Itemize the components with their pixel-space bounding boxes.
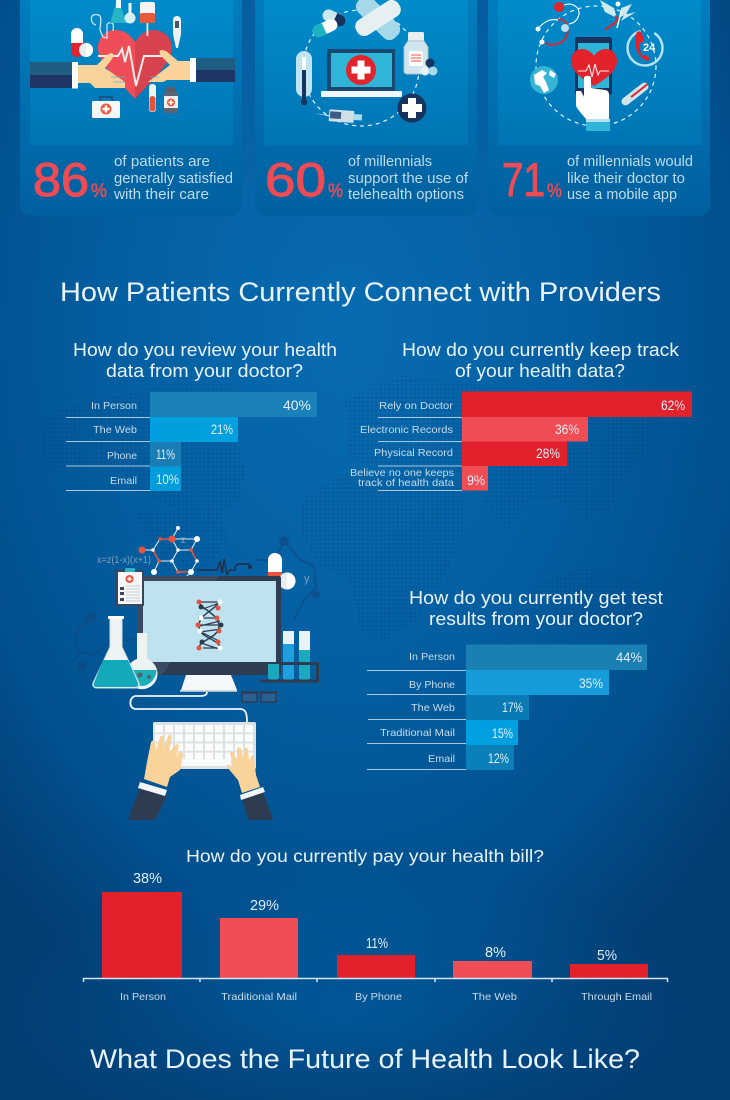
equation and variables bbox=[97, 535, 310, 585]
capsule bbox=[268, 553, 296, 590]
icon: IV bag bbox=[140, 2, 155, 36]
chart heading: How do you currently get test bbox=[409, 587, 663, 608]
text: telehealth support: support the use of bbox=[348, 171, 469, 187]
equation and variables: z bbox=[181, 535, 186, 546]
labels: 62% bbox=[661, 398, 685, 413]
labels: 40% bbox=[283, 398, 311, 413]
test tube rack bbox=[260, 631, 318, 682]
chart: keep track of health data bbox=[350, 339, 692, 490]
heading: how patients connect: How Patients Currently Connect with Providers bbox=[60, 277, 661, 307]
labels bbox=[91, 398, 311, 487]
bars bbox=[378, 392, 692, 490]
icon: test tube bbox=[149, 84, 156, 112]
stat: 71%: % bbox=[547, 181, 562, 202]
values: 29% bbox=[250, 898, 279, 914]
heading: future of health: What Does the Future of Health Look Like? bbox=[90, 1044, 640, 1074]
axis bbox=[84, 978, 668, 982]
chart heading: results from your doctor? bbox=[429, 608, 643, 629]
equation and variables: y bbox=[304, 573, 310, 585]
bars bbox=[102, 892, 648, 978]
stat: 86%: % bbox=[91, 181, 107, 202]
panel: telehealth stat bbox=[255, 0, 477, 216]
icon: plus badge bbox=[398, 94, 426, 122]
text: mobile app demand: of millennials would bbox=[567, 154, 693, 170]
stat: 60%: 60 bbox=[265, 153, 326, 206]
icon: laptop bbox=[321, 49, 402, 97]
labels: 9% bbox=[467, 473, 485, 488]
labels: Rely on Doctor bbox=[379, 400, 454, 412]
icon: pointing hand bbox=[576, 76, 610, 131]
dotted world map bbox=[44, 376, 661, 644]
labels: 35% bbox=[579, 676, 603, 691]
labels: By Phone bbox=[409, 679, 455, 691]
icon: bandage bbox=[352, 0, 404, 43]
keyboard bbox=[153, 722, 256, 769]
stat: 71%: 71 bbox=[502, 153, 545, 206]
icon: dotted orbit bbox=[303, 10, 419, 126]
labels: 15% bbox=[492, 726, 513, 741]
values bbox=[133, 871, 617, 964]
chart: pay health bill bbox=[84, 846, 668, 1003]
labels bbox=[380, 650, 642, 766]
icon: thermometer bbox=[620, 81, 650, 107]
text: mobile app demand bbox=[567, 154, 693, 203]
labels: 21% bbox=[211, 422, 233, 437]
labels: Email bbox=[428, 753, 455, 765]
icon: 24h clock: 24 bbox=[643, 42, 656, 54]
chart heading: data from your doctor? bbox=[106, 360, 303, 381]
labels: Through Email bbox=[581, 991, 652, 1003]
icon: thermometer bbox=[296, 51, 312, 105]
stat: 60%: % bbox=[328, 181, 343, 202]
labels: Electronic Records bbox=[360, 424, 453, 436]
labels: 17% bbox=[502, 700, 523, 715]
stat: 60% bbox=[265, 153, 343, 206]
text: satisfied patients: generally satisfied bbox=[114, 171, 233, 187]
labels: The Web bbox=[411, 702, 455, 714]
chart: get test results bbox=[367, 587, 663, 770]
chart heading: How do you review your health bbox=[73, 339, 337, 360]
values: 5% bbox=[597, 948, 617, 964]
labels: The Web bbox=[93, 424, 137, 436]
left hand bbox=[128, 734, 183, 820]
glasses bbox=[241, 692, 277, 702]
monitor bbox=[138, 576, 281, 692]
bars bbox=[367, 644, 647, 770]
illustration: computer and lab bbox=[72, 526, 319, 820]
labels: Traditional Mail bbox=[221, 991, 297, 1003]
text: satisfied patients bbox=[113, 154, 233, 203]
values: 38% bbox=[133, 871, 162, 887]
labels: Physical Record bbox=[374, 447, 453, 459]
cable bbox=[130, 692, 247, 722]
icon: globe bbox=[530, 66, 558, 94]
labels: 36% bbox=[555, 422, 579, 437]
labels: Phone bbox=[107, 450, 137, 462]
icon: pill bbox=[71, 28, 93, 57]
icon: stethoscope bbox=[91, 14, 113, 38]
labels bbox=[120, 991, 652, 1003]
conical flask bbox=[93, 616, 139, 688]
icon: caduceus bbox=[600, 0, 636, 30]
labels: 44% bbox=[616, 650, 642, 665]
text: telehealth support: telehealth options bbox=[348, 187, 464, 203]
bars bbox=[66, 392, 317, 491]
labels: Believe no one keeps bbox=[350, 467, 454, 479]
chart heading bbox=[73, 339, 337, 381]
panel: patient satisfaction stat bbox=[20, 0, 242, 216]
chart: review health data bbox=[66, 339, 337, 491]
chart heading bbox=[402, 339, 680, 381]
molecule background bbox=[72, 537, 319, 670]
icon: medicine bottle bbox=[404, 32, 438, 76]
labels bbox=[350, 398, 685, 489]
labels: In Person bbox=[91, 400, 137, 412]
labels: The Web bbox=[472, 991, 517, 1003]
chart heading: How do you currently pay your health bill? bbox=[186, 846, 544, 866]
icon: syringe bbox=[315, 108, 362, 124]
right hand bbox=[227, 747, 273, 820]
values: 11% bbox=[366, 936, 388, 952]
labels: Traditional Mail bbox=[380, 727, 455, 739]
labels: Email bbox=[110, 475, 137, 487]
icon: capsules bbox=[311, 7, 347, 39]
chart heading bbox=[409, 587, 663, 629]
text: satisfied patients: of patients are bbox=[114, 154, 210, 170]
stat: 86%: 86 bbox=[33, 153, 89, 206]
labels: 11% bbox=[156, 447, 175, 462]
icon: phone with heart bbox=[571, 37, 617, 95]
text: telehealth support: of millennials bbox=[348, 154, 432, 170]
icon: dotted orbit bbox=[536, 6, 656, 126]
molecule bbox=[138, 526, 200, 580]
icon: 24h clock bbox=[628, 30, 662, 66]
chart heading: How do you currently keep track bbox=[402, 339, 680, 360]
values: 8% bbox=[485, 945, 506, 961]
clipboard bbox=[115, 568, 144, 606]
icon: stethoscope bbox=[536, 2, 579, 45]
labels: 28% bbox=[536, 446, 560, 461]
icon: medicine bottle bbox=[164, 87, 178, 113]
icon: hands holding heart bbox=[30, 30, 235, 99]
labels: 10% bbox=[156, 472, 179, 487]
DNA helix bbox=[196, 600, 224, 650]
labels: track of health data bbox=[358, 477, 454, 489]
labels: 12% bbox=[488, 751, 509, 766]
icon: thermometer bbox=[173, 16, 181, 48]
chart heading: of your health data? bbox=[455, 360, 625, 381]
text: telehealth support bbox=[348, 154, 469, 203]
text: satisfied patients: with their care bbox=[113, 187, 209, 203]
text: mobile app demand: use a mobile app bbox=[567, 187, 677, 203]
equation and variables: x=z(1-x)(x+1) bbox=[97, 554, 151, 566]
labels: By Phone bbox=[355, 991, 402, 1003]
pulse line bbox=[197, 559, 252, 574]
panel: mobile app stat bbox=[488, 0, 710, 216]
text: mobile app demand: like their doctor to bbox=[567, 171, 685, 187]
icon: first aid kit bbox=[92, 97, 120, 118]
labels: In Person bbox=[120, 991, 166, 1003]
icon: flasks bbox=[110, 0, 136, 24]
labels: In Person bbox=[409, 651, 455, 663]
round flask bbox=[127, 633, 157, 689]
